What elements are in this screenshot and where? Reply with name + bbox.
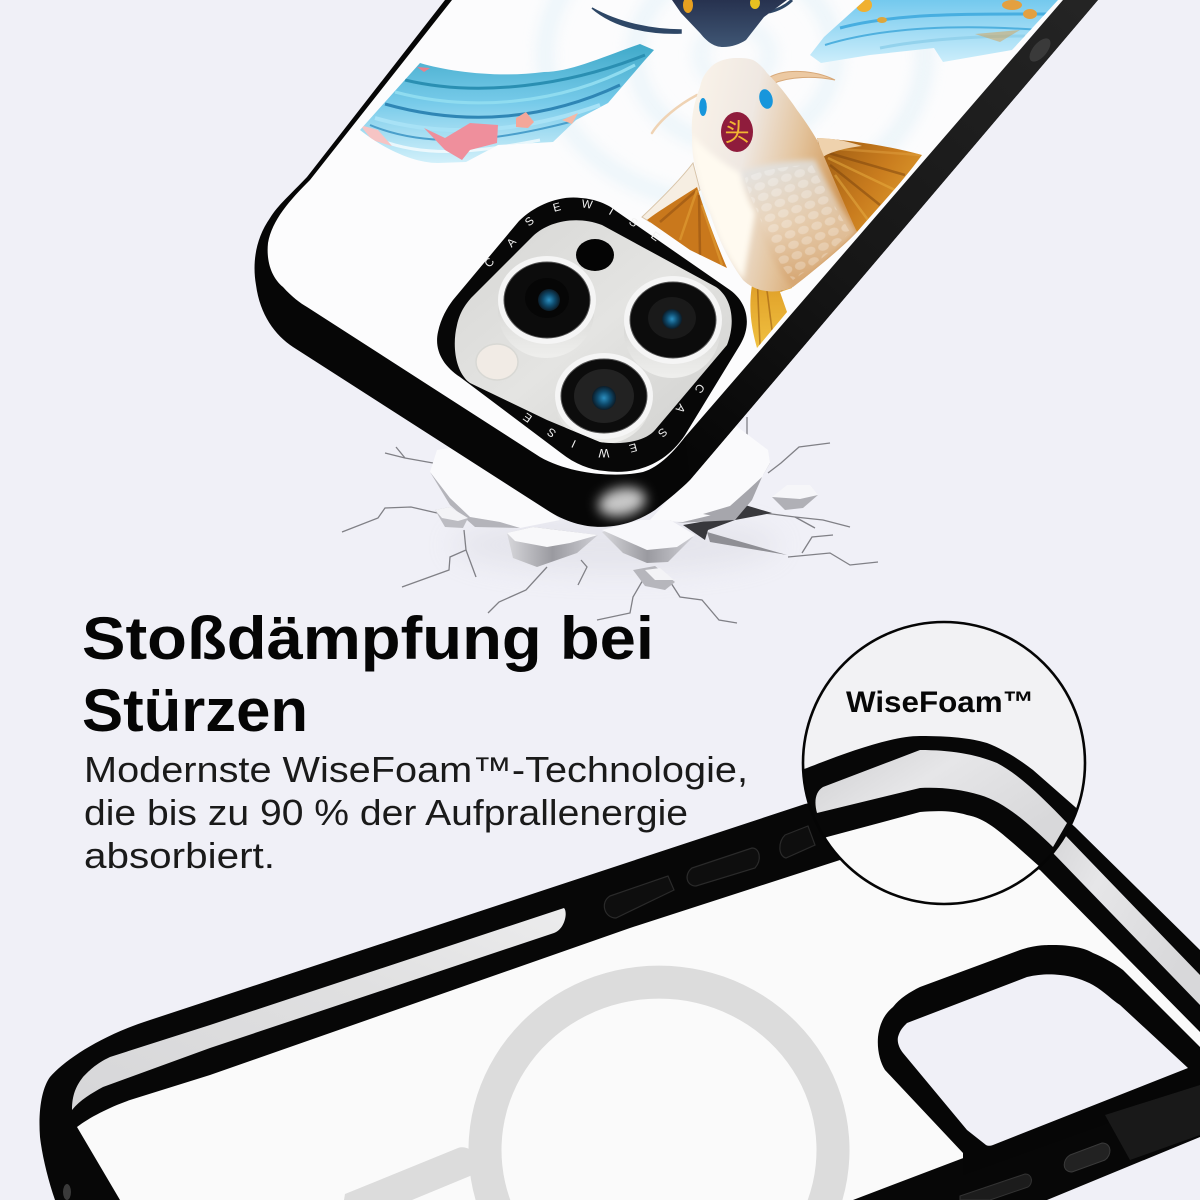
- heading: Stoßdämpfung bei: [82, 605, 654, 672]
- casewise lettering top: [483, 198, 662, 270]
- crack shadow: [450, 517, 780, 573]
- casewise lettering bottom: [521, 381, 706, 458]
- magnified foam band: [815, 750, 1067, 847]
- screen back panel with artwork: [268, 0, 1063, 475]
- camera cutout frame: [878, 945, 1200, 1175]
- pale blue rings: [545, 0, 925, 205]
- lidar sensor: [576, 239, 614, 271]
- casewise lettering top: E: [552, 201, 563, 215]
- case bumper: [255, 0, 1098, 527]
- bottom phone case back view: [39, 760, 1200, 1200]
- module window: [455, 220, 732, 443]
- circle fill: [803, 622, 1085, 904]
- white panel: [268, 0, 1063, 475]
- heading: [82, 605, 654, 744]
- casewise lettering top: A: [505, 236, 519, 250]
- casewise lettering top: S: [523, 215, 537, 229]
- bumper details: [596, 0, 1098, 521]
- casewise lettering top: W: [581, 198, 593, 212]
- casewise lettering bottom: E: [627, 440, 638, 454]
- left large shard: [430, 445, 560, 528]
- koi red head mark: [721, 112, 753, 152]
- flash: [476, 344, 518, 380]
- centre right shard: [602, 520, 695, 563]
- speaker hole: [63, 1184, 71, 1200]
- side buttons: [604, 826, 815, 918]
- casewise lettering top: S: [626, 216, 640, 230]
- koi body: [692, 58, 857, 291]
- transparent right side slot: [1030, 812, 1200, 1005]
- right large shard: [650, 425, 770, 523]
- heading: Stürzen: [82, 677, 308, 744]
- koi gold lower fin: [750, 286, 792, 348]
- small shards: [435, 485, 818, 590]
- koi whiskers: [652, 71, 835, 133]
- top phone with black case: [240, 0, 1100, 527]
- koi scale texture: [745, 165, 850, 280]
- koi eyes: [759, 89, 773, 109]
- circle outline: [803, 622, 1085, 904]
- casewise lettering top: I: [607, 206, 615, 218]
- casewise lettering bottom: E: [521, 410, 535, 424]
- casewise lettering bottom: S: [655, 425, 669, 439]
- casewise lettering bottom: W: [598, 446, 609, 458]
- lens top left: [498, 256, 596, 358]
- magsafe ring: [468, 966, 850, 1200]
- head mark character: 头: [724, 113, 750, 149]
- body text: absorbiert.: [84, 835, 275, 876]
- zoom circle magnifying the WiseFoam rim: [790, 622, 1090, 920]
- magnified black rim: [804, 736, 1076, 866]
- dark fish head: [592, 0, 792, 47]
- bottom edge details: [960, 1085, 1200, 1200]
- casewise lettering top: C: [483, 256, 497, 270]
- casewise lettering bottom: C: [692, 381, 706, 395]
- cracked ground illustration: [342, 417, 878, 623]
- case outer black shell: [39, 760, 1200, 1200]
- body text: [84, 749, 748, 876]
- dark wedge cracks: [683, 463, 787, 555]
- magsafe alignment pill: [344, 1147, 479, 1200]
- koi scaled flank: [740, 160, 857, 287]
- casewise lettering bottom: A: [673, 401, 687, 415]
- transparent left side slot: [72, 908, 566, 1110]
- casewise lettering bottom: S: [545, 425, 559, 439]
- body text: Modernste WiseFoam™-Technologie,: [84, 749, 748, 790]
- lens right: [624, 276, 722, 378]
- casewise lettering top: E: [648, 230, 662, 244]
- magnified rim: [804, 736, 1076, 866]
- crack lines: [342, 417, 878, 623]
- koi right orange fin: [817, 138, 922, 232]
- koi left orange fin: [642, 163, 727, 268]
- module black frame: [437, 197, 747, 472]
- casewise lettering bottom: I: [570, 437, 578, 449]
- centre left shard: [507, 527, 598, 567]
- zoom label: WiseFoam™: [846, 686, 1034, 719]
- lens bottom: [555, 353, 653, 444]
- body text: die bis zu 90 % der Aufprallenergie: [84, 792, 688, 833]
- magnified clear panel: [790, 811, 1040, 920]
- right blue fin: [810, 0, 1058, 63]
- camera module: [437, 197, 747, 472]
- left blue fin: [360, 44, 654, 163]
- koi pale belly: [692, 135, 755, 280]
- clear back panel: [77, 830, 1200, 1200]
- window contents: [476, 239, 722, 444]
